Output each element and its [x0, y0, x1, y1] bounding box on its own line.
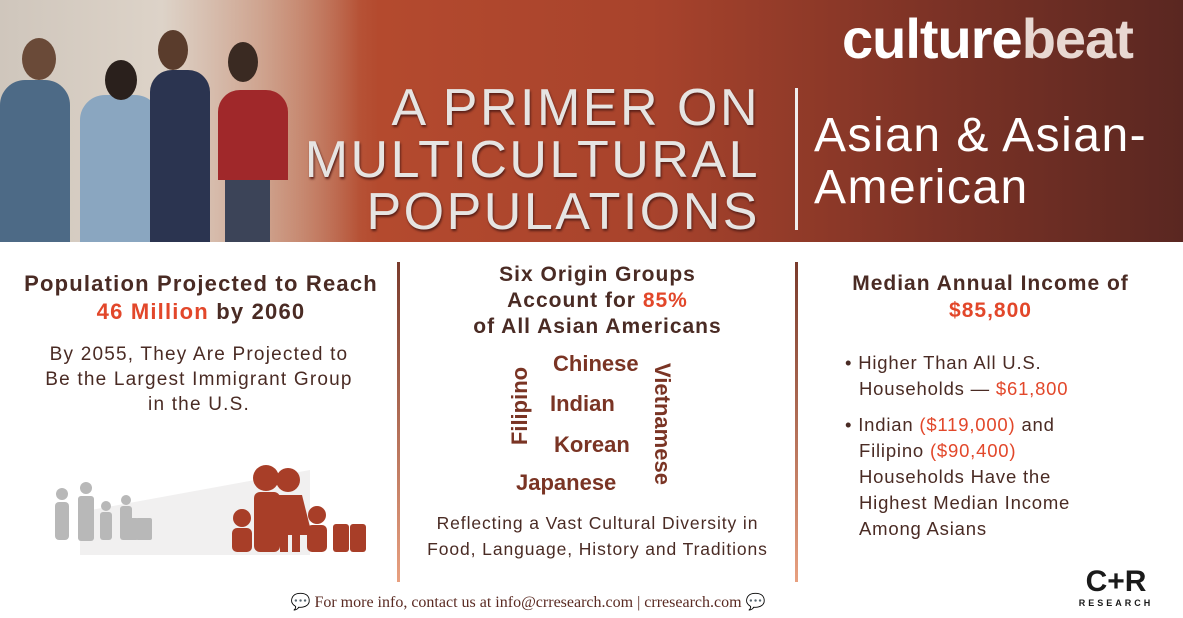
- subtitle: [814, 109, 1147, 214]
- title: MULTICULTURAL: [305, 131, 760, 189]
- logo: C+R research: C+R: [1086, 565, 1146, 598]
- heading: [852, 272, 1129, 322]
- header banner: [0, 0, 1183, 242]
- logo: C+R research: RESEARCH: [1079, 598, 1153, 608]
- title: POPULATIONS: [366, 183, 760, 241]
- text: Be the Largest Immigrant Group: [45, 369, 353, 390]
- word cloud: [507, 351, 675, 495]
- bullets: Highest Median Income: [859, 492, 1070, 513]
- title: [305, 79, 760, 241]
- logo: culturebeat: culturebeat: [842, 7, 1133, 70]
- logo: C+R research: [1079, 565, 1153, 608]
- heading: 46 Million by 2060: [97, 299, 305, 324]
- bullets: Households — $61,800: [859, 378, 1068, 399]
- heading: Median Annual Income of: [852, 272, 1129, 295]
- word cloud: Filipino: [507, 367, 532, 445]
- bullets: • Higher Than All U.S.: [845, 352, 1041, 373]
- text: [427, 513, 768, 559]
- bullets: • Indian ($119,000) and: [845, 414, 1055, 435]
- text: Reflecting a Vast Cultural Diversity in: [437, 513, 758, 533]
- text: Food, Language, History and Traditions: [427, 539, 768, 559]
- photo of four friends: [0, 0, 360, 242]
- panel: income: [845, 272, 1129, 539]
- title: A PRIMER ON: [392, 79, 760, 137]
- icon: families growing: [55, 465, 366, 555]
- footer contact: 💬 For more info, contact us at info@crresearch.com | crresearch.com 💬: [291, 594, 765, 611]
- heading: [24, 271, 378, 324]
- heading: Six Origin Groups: [499, 263, 696, 286]
- word cloud: Korean: [554, 432, 630, 457]
- bullets: Filipino ($90,400): [859, 440, 1016, 461]
- bullets: [845, 352, 1070, 539]
- bullets: Among Asians: [859, 518, 987, 539]
- divider lines: [397, 262, 400, 582]
- word cloud: Vietnamese: [650, 363, 675, 485]
- heading: Population Projected to Reach: [24, 271, 378, 296]
- word cloud: Japanese: [516, 470, 616, 495]
- word cloud: Indian: [550, 391, 615, 416]
- panel: origin groups: [427, 263, 768, 559]
- heading: Account for 85%: [507, 289, 688, 312]
- text: [45, 344, 353, 415]
- word cloud: Chinese: [553, 351, 639, 376]
- heading: [473, 263, 722, 338]
- subtitle: American: [814, 161, 1029, 214]
- heading: of All Asian Americans: [473, 315, 722, 338]
- panel: population: [24, 271, 378, 555]
- subtitle: Asian & Asian-: [814, 109, 1147, 162]
- heading: $85,800: [949, 299, 1032, 322]
- text: in the U.S.: [148, 394, 250, 415]
- bullets: Households Have the: [859, 466, 1051, 487]
- text: By 2055, They Are Projected to: [50, 344, 348, 365]
